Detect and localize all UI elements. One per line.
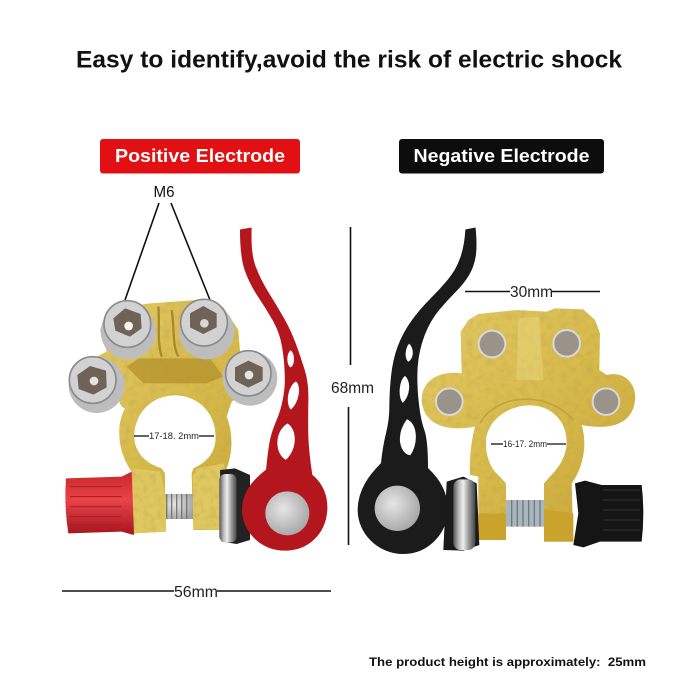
dimension: inner diameter 16-17.2mm — [491, 439, 566, 449]
red lever — [241, 228, 327, 550]
dimension: inner diameter 16-17.2mm: 16-17. 2mm — [503, 439, 547, 449]
black knob — [573, 481, 643, 547]
clamp opening — [486, 405, 567, 513]
dimension: inner diameter 17-18.2mm: 17-18. 2mm — [149, 431, 199, 441]
negative battery terminal — [358, 228, 643, 553]
dimension: height 68mm: 68mm — [331, 380, 374, 397]
clamp bolt — [506, 500, 544, 527]
label: negative electrode: Negative Electrode — [414, 146, 590, 166]
bolt hole: right — [593, 388, 619, 415]
brass body — [422, 308, 635, 542]
bolt: left — [69, 357, 125, 413]
bearing — [220, 468, 250, 544]
clamp bolt — [162, 494, 193, 519]
label: negative electrode — [399, 139, 604, 174]
bolt: upper right — [179, 299, 234, 359]
black lever — [358, 228, 476, 553]
bolt: upper left — [101, 301, 156, 359]
bolt hole: left — [436, 388, 463, 415]
rivet — [265, 491, 309, 535]
recess shading — [127, 358, 223, 383]
label: positive electrode — [100, 139, 300, 174]
dimension: width 30mm: 30mm — [510, 284, 553, 301]
brass lugs — [133, 468, 166, 533]
bearing — [443, 477, 479, 551]
title: Easy to identify,avoid the risk of electric shock — [76, 46, 622, 74]
bolt: right — [223, 351, 277, 406]
dimension: width 56mm: 56mm — [174, 584, 218, 601]
brass body — [97, 300, 263, 533]
clamp opening — [134, 395, 216, 497]
label: positive electrode: Positive Electrode — [115, 146, 285, 166]
positive battery terminal — [65, 228, 327, 550]
rivet — [375, 486, 420, 531]
bolt hole: upper left — [479, 331, 505, 357]
callout: M6 bolts — [125, 184, 210, 300]
lower lug shading — [478, 509, 573, 542]
footnote: The product height is approximately: 25mm — [369, 657, 646, 669]
dimension: width 30mm — [465, 284, 600, 301]
dimension: inner diameter 17-18.2mm — [134, 431, 214, 441]
red knob — [65, 472, 134, 535]
callout: M6 bolts: M6 — [154, 184, 175, 201]
bolt hole: upper right — [553, 330, 580, 357]
